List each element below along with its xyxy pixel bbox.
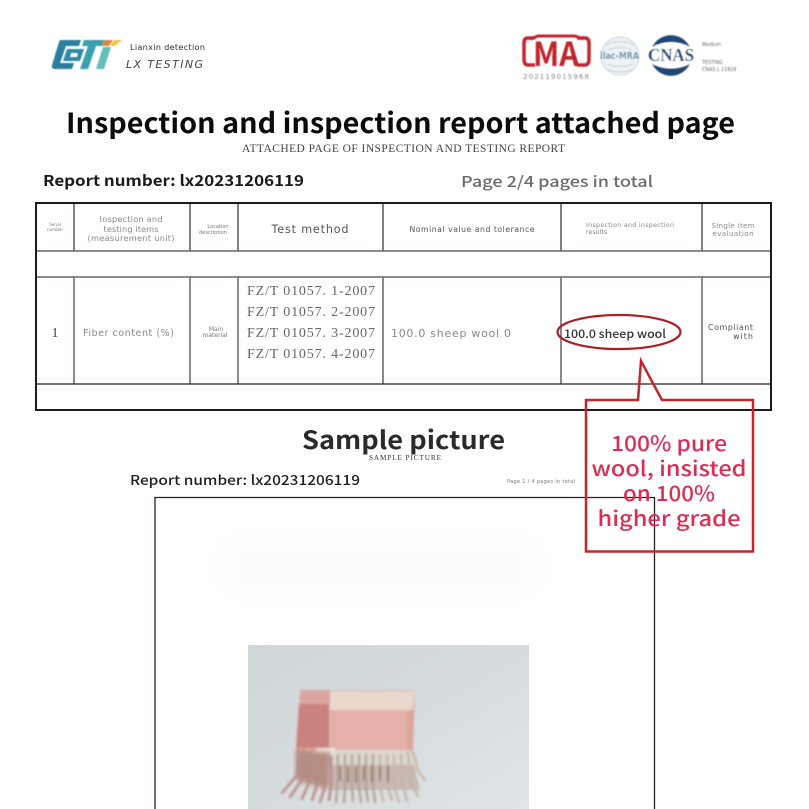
- icon: ilac-MRA mark: [600, 37, 640, 75]
- table data row: [52, 284, 753, 362]
- table header row: Single item: [712, 222, 755, 230]
- callout: 100% pure wool: [586, 361, 753, 552]
- subtitle: ATTACHED PAGE OF INSPECTION AND TESTING REPORT: [242, 143, 565, 155]
- table header row: results: [586, 229, 607, 236]
- table header row: Inspection and inspection: [586, 222, 674, 229]
- second page count: Page 1 / 4 pages in total: [507, 479, 575, 485]
- icon: CMA mark: [523, 28, 589, 81]
- table data row: 100.0 sheep wool 0: [391, 327, 511, 340]
- callout text: higher grade: [598, 503, 740, 533]
- scarf fringe band: [330, 750, 417, 772]
- table header row: evaluation: [712, 230, 754, 238]
- icon: CNAS mark: [648, 33, 694, 77]
- logo: LX Testing: [52, 40, 205, 71]
- sample picture subheading: SAMPLE PICTURE: [369, 454, 442, 462]
- table data row: with: [733, 332, 753, 341]
- page count: Page 2/4 pages in total: [461, 171, 653, 192]
- accreditation small text: [701, 42, 736, 73]
- report number: Report number: lx20231206119: [43, 170, 304, 191]
- icon: CMA mark: MA: [533, 28, 580, 76]
- table data row: FZ/T 01057. 2-2007: [247, 305, 375, 320]
- table header row: Nominal value and tolerance: [410, 225, 535, 234]
- table grid: [36, 203, 771, 410]
- sample photo: [248, 645, 529, 809]
- sample picture frame: [155, 498, 654, 809]
- table data row: FZ/T 01057. 1-2007: [247, 284, 375, 299]
- scarf fringe: [282, 750, 425, 802]
- icon: CNAS mark: CNAS: [648, 45, 694, 65]
- accreditation small text: CNAS L 11829: [702, 67, 736, 73]
- second report number: Report number: lx20231206119: [130, 469, 360, 489]
- highlight ellipse: [558, 315, 680, 349]
- accreditation logos: [523, 28, 736, 81]
- table data row: 100.0 sheep wool: [564, 326, 667, 342]
- faint smudge in frame: [225, 545, 535, 590]
- table header row: Inspection and: [100, 214, 162, 224]
- inspection table: [36, 203, 771, 410]
- accreditation small text: TESTING: [701, 60, 723, 66]
- title: Inspection and inspection report attached page: [66, 102, 735, 142]
- table header row: Test method: [270, 223, 348, 236]
- table data row: Compliant: [708, 323, 753, 332]
- callout text: on 100%: [623, 478, 715, 508]
- logo text: Lianxin detection: Lianxin detection: [130, 42, 205, 52]
- accreditation small text: Medium: [702, 42, 722, 48]
- scarf: [282, 690, 425, 802]
- table header row: [47, 214, 755, 243]
- icon: CMA mark: 202119015968: [523, 72, 589, 81]
- table data row: Fiber content (%): [83, 328, 174, 339]
- table header row: Serial: [49, 222, 61, 227]
- table data row: 1: [52, 326, 58, 341]
- table header row: Location: [207, 224, 229, 230]
- photo background: [248, 645, 529, 809]
- table header row: description: [199, 230, 227, 236]
- table data row: Main: [209, 326, 223, 333]
- sample picture heading: Sample picture: [302, 421, 505, 457]
- callout text: [592, 428, 746, 533]
- table header row: number: [47, 227, 63, 232]
- table header row: testing items: [104, 224, 158, 234]
- callout text: wool, insisted: [592, 453, 746, 483]
- callout box with pointer: [586, 361, 753, 552]
- logo text: LX TESTING: LX TESTING: [126, 58, 203, 71]
- icon: ilac-MRA mark: ilac-MRA: [600, 51, 640, 62]
- icon: LTI mark: [52, 40, 122, 69]
- table data row: FZ/T 01057. 3-2007: [247, 326, 375, 341]
- table header row: (measurement unit): [88, 233, 174, 243]
- callout text: 100% pure: [611, 428, 727, 458]
- table data row: FZ/T 01057. 4-2007: [247, 347, 375, 362]
- table data row: material: [202, 332, 228, 339]
